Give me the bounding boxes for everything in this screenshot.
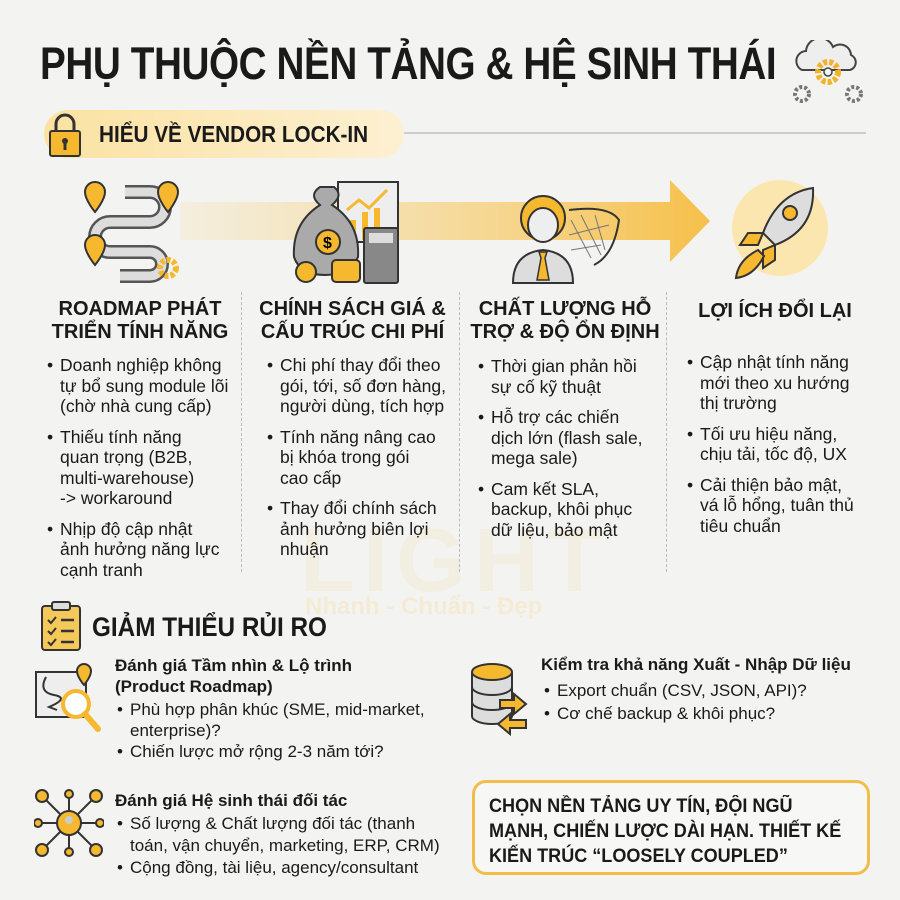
column 3: [470, 296, 660, 540]
column 2: [259, 297, 446, 559]
icon: rocket: [732, 180, 828, 280]
block: roadmap evaluation: Phù hợp phân khúc (SME, mid-market,: [130, 700, 425, 719]
column 2: nhuận: [280, 539, 329, 559]
column 3: Thời gian phản hồi: [491, 356, 637, 376]
icon: clipboard: [41, 601, 81, 651]
section header: giảm thiểu rủi ro: [41, 601, 327, 651]
column 1: -> workaround: [60, 488, 172, 508]
column 1: ROADMAP PHÁT: [59, 298, 221, 320]
column 1: [48, 297, 228, 580]
section header: vendor lock-in: [44, 110, 404, 158]
block: partner ecosystem: Đánh giá Hệ sinh thái đối tác: [115, 791, 347, 810]
callout box: CHỌN NỀN TẢNG UY TÍN, ĐỘI NGŨ: [489, 796, 793, 817]
column 4: thị trường: [700, 393, 777, 413]
column 3: Hỗ trợ các chiến: [491, 407, 619, 427]
block: data export: [541, 655, 851, 723]
icon: money & calculator: $: [323, 235, 332, 252]
block: partner ecosystem: [115, 791, 440, 877]
column 3: CHẤT LƯỢNG HỖ: [479, 298, 651, 320]
block: roadmap evaluation: (Product Roadmap): [115, 677, 273, 696]
column 1: Doanh nghiệp không: [60, 355, 222, 375]
column 1: tự bổ sung module lõi: [60, 376, 228, 396]
column 3: TRỢ & ĐỘ ỔN ĐỊNH: [470, 321, 660, 343]
column 2: Chi phí thay đổi theo: [280, 355, 441, 375]
watermark slogan: Nhanh - Chuẩn - Đẹp: [305, 593, 542, 620]
section header: vendor lock-in: HIỂU VỀ VENDOR LOCK-IN: [99, 121, 368, 147]
arrow band: [180, 180, 710, 262]
column 1: multi-warehouse): [60, 468, 194, 488]
column 4: [688, 298, 854, 536]
column 4: mới theo xu hướng: [700, 372, 849, 392]
title: PHỤ THUỘC NỀN TẢNG & HỆ SINH THÁI: [40, 38, 776, 89]
column 4: vá lỗ hổng, tuân thủ: [700, 495, 854, 515]
block: data export: Cơ chế backup & khôi phục?: [557, 704, 775, 723]
column 2: CHÍNH SÁCH GIÁ &: [259, 298, 446, 320]
callout box: [472, 780, 870, 875]
column 2: ảnh hưởng biên lợi: [280, 518, 429, 538]
column 3: dữ liệu, bảo mật: [491, 520, 618, 540]
block: partner ecosystem: Số lượng & Chất lượng đối tác (thanh: [130, 814, 415, 833]
column 3: mega sale): [491, 448, 578, 468]
column 1: Nhịp độ cập nhật: [60, 518, 192, 538]
column 4: LỢI ÍCH ĐỔI LẠI: [698, 300, 852, 322]
icon: cloud gears: [793, 40, 863, 103]
column 3: sự cố kỹ thuật: [491, 376, 601, 396]
column 2: gói, tới, số đơn hàng,: [280, 376, 446, 396]
icon: network: [34, 789, 104, 857]
column 4: tiêu chuẩn: [700, 516, 781, 536]
callout box: KIẾN TRÚC “LOOSELY COUPLED”: [489, 846, 788, 867]
column 4: Cập nhật tính năng: [700, 352, 849, 372]
icon: roadmap: [84, 181, 179, 283]
block: roadmap evaluation: enterprise)?: [130, 721, 221, 740]
column 2: người dùng, tích hợp: [280, 396, 444, 416]
column 4: Tối ưu hiệu năng,: [700, 424, 837, 444]
column 4: chịu tải, tốc độ, UX: [700, 444, 847, 464]
block: partner ecosystem: toán, vận chuyển, marketing, ERP, CRM): [130, 836, 440, 855]
watermark: LIGHT: [300, 511, 610, 611]
section header: giảm thiểu rủi ro: GIẢM THIỂU RỦI RO: [92, 612, 327, 642]
column 3: Cam kết SLA,: [491, 478, 599, 498]
column 1: TRIỂN TÍNH NĂNG: [52, 321, 228, 343]
icon: database transfer: [471, 663, 528, 736]
block: roadmap evaluation: Đánh giá Tầm nhìn & Lộ trình: [115, 656, 352, 675]
column 2: CẤU TRÚC CHI PHÍ: [261, 321, 444, 343]
block: partner ecosystem: Cộng đồng, tài liệu, agency/consultant: [130, 858, 418, 877]
column 2: Thay đổi chính sách: [280, 498, 437, 518]
column 3: dịch lớn (flash sale,: [491, 428, 643, 448]
icon: money & calculator: [292, 181, 399, 284]
block: data export: Export chuẩn (CSV, JSON, API)?: [557, 681, 807, 700]
column 1: ảnh hưởng năng lực: [60, 539, 219, 559]
callout box: MẠNH, CHIẾN LƯỢC DÀI HẠN. THIẾT KẾ: [489, 821, 841, 842]
column 1: cạnh tranh: [60, 560, 143, 580]
column 1: (chờ nhà cung cấp): [60, 396, 212, 416]
icon: map search: [35, 663, 101, 732]
column 2: cao cấp: [280, 468, 341, 488]
icon: padlock: [49, 114, 81, 157]
block: roadmap evaluation: [115, 656, 425, 761]
block: roadmap evaluation: Chiến lược mở rộng 2-3 năm tới?: [130, 742, 384, 761]
column 1: quan trọng (B2B,: [60, 447, 192, 467]
block: data export: Kiểm tra khả năng Xuất - Nhập Dữ liệu: [541, 655, 851, 674]
column 2: Tính năng nâng cao: [280, 426, 436, 446]
column 1: Thiếu tính năng: [60, 426, 182, 446]
icon: support agent: [512, 195, 620, 284]
column 3: backup, khôi phục: [491, 499, 632, 519]
column 4: Cải thiện bảo mật,: [700, 474, 842, 494]
column 2: bị khóa trong gói: [280, 447, 409, 467]
